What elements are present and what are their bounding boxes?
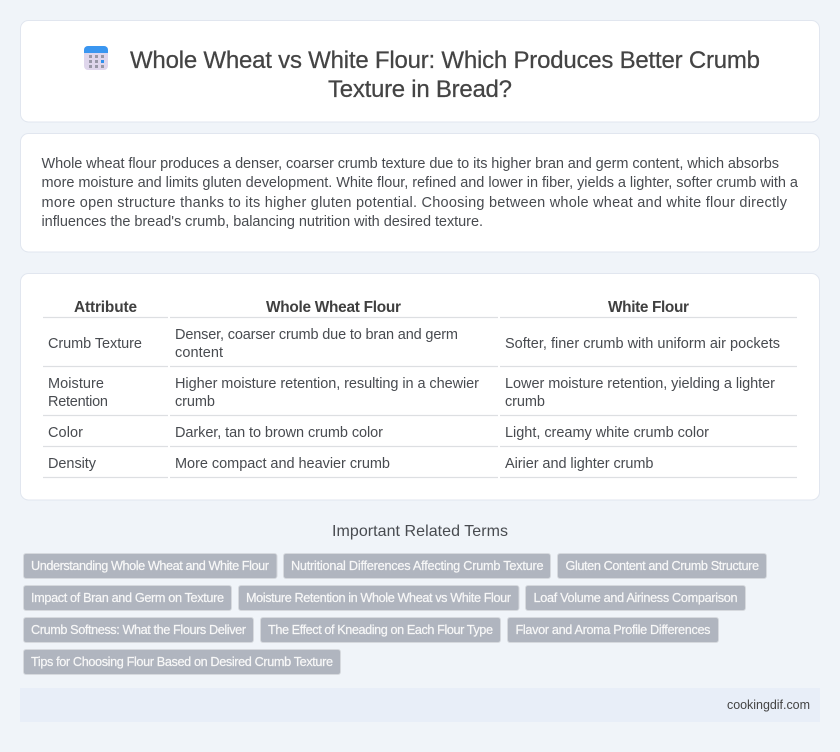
table row: crumb texture: Softer, finer crumb with uniform air pockets	[505, 336, 780, 352]
tag: Flavor and Aroma Profile Differences	[516, 623, 710, 637]
table row: crumb texture	[48, 327, 780, 361]
tag: Tips for Choosing Flour Based on Desired Crumb Texture	[31, 655, 333, 669]
text block: intro paragraph: Whole wheat flour produces a denser, coarser crumb texture due to its higher bran and germ content, which absorbs	[42, 156, 779, 172]
text block: intro paragraph: influences the bread's crumb, balancing nutrition with desired texture.	[42, 214, 483, 230]
table row: crumb texture: Denser, coarser crumb due to bran and germ	[175, 327, 458, 343]
table header: White Flour	[608, 299, 689, 316]
tag	[24, 554, 277, 578]
table row: moisture retention: Moisture	[48, 376, 104, 392]
table row: density: Density	[48, 456, 97, 472]
table header: Attribute	[74, 299, 137, 316]
table row: crumb texture: Crumb Texture	[48, 336, 142, 352]
tag: Loaf Volume and Airiness Comparison	[534, 591, 738, 605]
tag list: related terms	[24, 554, 766, 674]
table row: color: Color	[48, 425, 83, 441]
tag	[284, 554, 550, 578]
table row: moisture retention: Lower moisture retention, yielding a lighter	[505, 376, 775, 392]
icon: calendar	[84, 46, 108, 70]
table row: moisture retention: crumb	[175, 394, 215, 410]
table header: Whole Wheat Flour	[266, 299, 401, 316]
text block: intro paragraph	[42, 156, 799, 230]
table header	[74, 299, 689, 316]
footer bar	[20, 688, 820, 722]
table row: density: Airier and lighter crumb	[505, 456, 654, 472]
tag	[24, 650, 340, 674]
tag: Crumb Softness: What the Flours Deliver	[31, 623, 247, 637]
tag	[24, 586, 232, 610]
table row: density	[48, 456, 654, 472]
title: Texture in Bread?	[328, 76, 512, 103]
panel: introduction	[20, 134, 820, 252]
tag	[24, 618, 254, 642]
tag	[260, 618, 500, 642]
table row: moisture retention: Higher moisture retention, resulting in a chewier	[175, 376, 479, 392]
tag	[238, 586, 519, 610]
title: Whole Wheat vs White Flour: Which Produces Better Crumb	[130, 47, 760, 74]
table row: moisture retention: crumb	[505, 394, 545, 410]
text block: intro paragraph: more moisture and limits gluten development. White flour, refined and lower in fiber, yields a lighter, softer crumb with a	[42, 175, 799, 191]
tag: Moisture Retention in Whole Wheat vs White Flour	[246, 591, 512, 605]
table row: density: More compact and heavier crumb	[175, 456, 390, 472]
panel: title header	[20, 20, 820, 122]
heading: important related terms: Important Related Terms	[332, 523, 508, 540]
table row: crumb texture: content	[175, 345, 223, 361]
table row: moisture retention	[48, 376, 775, 410]
tag: The Effect of Kneading on Each Flour Type	[268, 623, 493, 637]
table row: color: Darker, tan to brown crumb color	[175, 425, 383, 441]
tag: Understanding Whole Wheat and White Flour	[31, 559, 270, 573]
tag	[508, 618, 718, 642]
title	[130, 47, 760, 103]
panel: comparison table	[20, 274, 820, 500]
table row: color: Light, creamy white crumb color	[505, 425, 709, 441]
tag: Gluten Content and Crumb Structure	[566, 559, 759, 573]
tag: Nutritional Differences Affecting Crumb Texture	[291, 559, 544, 573]
text block: intro paragraph: more open structure thanks to its higher gluten potential. Choosing between whole wheat and white flour directly	[42, 195, 788, 211]
table row: color	[48, 425, 709, 441]
tag	[558, 554, 766, 578]
tag: Impact of Bran and Germ on Texture	[31, 591, 224, 605]
footer source text: cookingdif.com	[727, 698, 810, 712]
table row: moisture retention: Retention	[48, 394, 108, 410]
tag	[526, 586, 746, 610]
